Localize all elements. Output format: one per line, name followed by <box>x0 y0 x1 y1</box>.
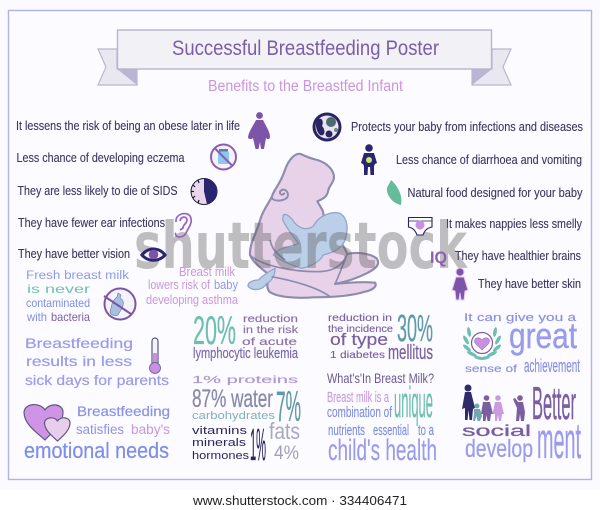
title: Successful Breastfeeding Poster <box>172 36 439 60</box>
word cloud: milk composition: vitamins <box>192 425 248 437</box>
text block: fresh breast milk: with <box>26 310 47 324</box>
word cloud: milk composition: hormones <box>192 450 250 462</box>
mother <box>250 154 378 298</box>
text block: great achievement <box>464 312 580 376</box>
word cloud: milk composition: 87% water <box>192 385 273 413</box>
stat: 20% leukemia: in the risk <box>243 324 299 336</box>
text block: fresh breast milk: contaminated <box>26 296 90 310</box>
word cloud: milk composition: carbohydrates <box>192 410 276 422</box>
watermark: shutterstock <box>134 210 468 284</box>
right benefits list: They have healthier brains <box>455 249 581 263</box>
text block: what's in breast milk: nutrients <box>328 422 365 439</box>
stat: 30% diabetes: the incidence <box>328 324 393 335</box>
icon: eye <box>140 248 167 262</box>
text block: fresh breast milk <box>26 270 129 324</box>
left benefits list: They are less likely to die of SIDS <box>18 184 178 198</box>
footer url: www.shutterstock.com · 334406471 <box>192 494 407 508</box>
icon: obese person <box>248 112 270 149</box>
text block: sick days <box>25 335 169 388</box>
baby <box>248 213 347 290</box>
text block: fresh breast milk: is never <box>27 282 90 296</box>
text block: better social development: social <box>462 423 531 440</box>
icon: girl <box>452 268 468 300</box>
right benefits list <box>351 120 583 291</box>
word cloud: milk composition: minerals <box>192 437 247 449</box>
text block: breast milk asthma: Breast milk <box>179 265 236 279</box>
icon: hearts <box>24 405 70 441</box>
icon: family <box>462 384 525 421</box>
stat: 20% leukemia <box>193 309 299 362</box>
icon: clock <box>191 178 217 204</box>
icon: leaf <box>387 180 401 205</box>
text block: what's in breast milk: combination of <box>327 404 393 421</box>
text block: sick days: results in less <box>26 353 132 369</box>
right benefits list: They have better skin <box>478 277 581 291</box>
stat: 30% diabetes: of type <box>330 330 388 349</box>
icon: crossed bottle <box>104 288 136 320</box>
text block: fresh breast milk: Fresh breast milk <box>26 270 129 282</box>
text block: emotional needs: emotional needs <box>24 438 169 463</box>
text: 30% <box>397 308 433 350</box>
stat: 30% diabetes: mellitus <box>388 342 433 364</box>
icon: germs circle <box>312 112 342 142</box>
text block: emotional needs: Breastfeeding <box>77 404 170 419</box>
left benefits list: They have better vision <box>18 247 130 261</box>
text block: what's in breast milk: child's health <box>328 434 437 467</box>
text block: what's in breast milk: Breast milk is a <box>327 389 389 406</box>
text block: great achievement: great <box>509 315 577 356</box>
icon: boy with tummy <box>361 144 377 175</box>
icon: thermometer <box>150 338 160 374</box>
word cloud: milk composition: 1% <box>250 419 266 470</box>
text block: what's in breast milk: essential <box>373 422 409 439</box>
stat: 30% diabetes: reduction in <box>328 313 392 324</box>
left benefits list <box>16 119 240 261</box>
text: 7% <box>276 383 301 431</box>
text block: great achievement: It can give you a <box>464 312 577 324</box>
stat: 20% leukemia: lymphocytic leukemia <box>193 345 298 362</box>
icon: ear <box>176 214 191 237</box>
text: unique <box>394 378 433 427</box>
text block: better social development <box>462 377 581 469</box>
stat: 30% diabetes: 1 diabetes <box>330 350 385 361</box>
text block: breast milk asthma: baby <box>214 278 239 292</box>
text block: what's in breast milk: What's'In Breast Milk? <box>327 370 434 386</box>
text block: great achievement: sense of <box>465 363 517 375</box>
left benefits list: Less chance of developing eczema <box>16 151 185 165</box>
illustration: mother and baby <box>248 154 378 298</box>
text block: sick days: sick days for parents <box>25 372 169 388</box>
stat: 20% leukemia: reduction <box>243 313 298 325</box>
icon: IQ: IQ <box>430 248 447 267</box>
mother arm and lap lines <box>250 240 347 297</box>
text block: better social development: develop <box>465 435 533 463</box>
text block: breast milk asthma: developing asthma <box>146 293 238 307</box>
hair curl <box>272 190 288 201</box>
text block: what's in breast milk: to a <box>418 422 434 439</box>
stat: 30% diabetes <box>328 308 433 364</box>
subtitle: Benefits to the Breastfed Infant <box>208 78 404 95</box>
text block: sick days: Breastfeeding <box>25 335 133 351</box>
text block: breast milk asthma <box>146 265 239 307</box>
text block: emotional needs: satisfies <box>76 421 124 437</box>
title banner <box>98 30 511 85</box>
text block: fresh breast milk: bacteria <box>51 310 90 324</box>
icon: nappy <box>408 218 432 235</box>
word cloud: milk composition: 4% <box>274 443 299 464</box>
word cloud: milk composition: fats <box>269 418 300 444</box>
text block: breast milk asthma: lowers risk of <box>148 278 210 292</box>
icon: laurel heart <box>462 327 502 361</box>
text block: what's in breast milk <box>327 370 437 467</box>
icon: no eczema jar <box>211 144 236 170</box>
left benefits list: It lessens the risk of being an obese later in life <box>16 119 240 133</box>
word cloud: milk composition <box>192 374 301 470</box>
text block: emotional needs: baby's <box>131 421 170 437</box>
stat: 20% leukemia: 20% <box>193 309 236 353</box>
stat: 20% leukemia: of acute <box>242 336 297 348</box>
word cloud: milk composition: 1% proteins <box>192 374 298 386</box>
left benefits list: They have fewer ear infections <box>18 216 165 230</box>
text block: emotional needs <box>24 404 170 463</box>
